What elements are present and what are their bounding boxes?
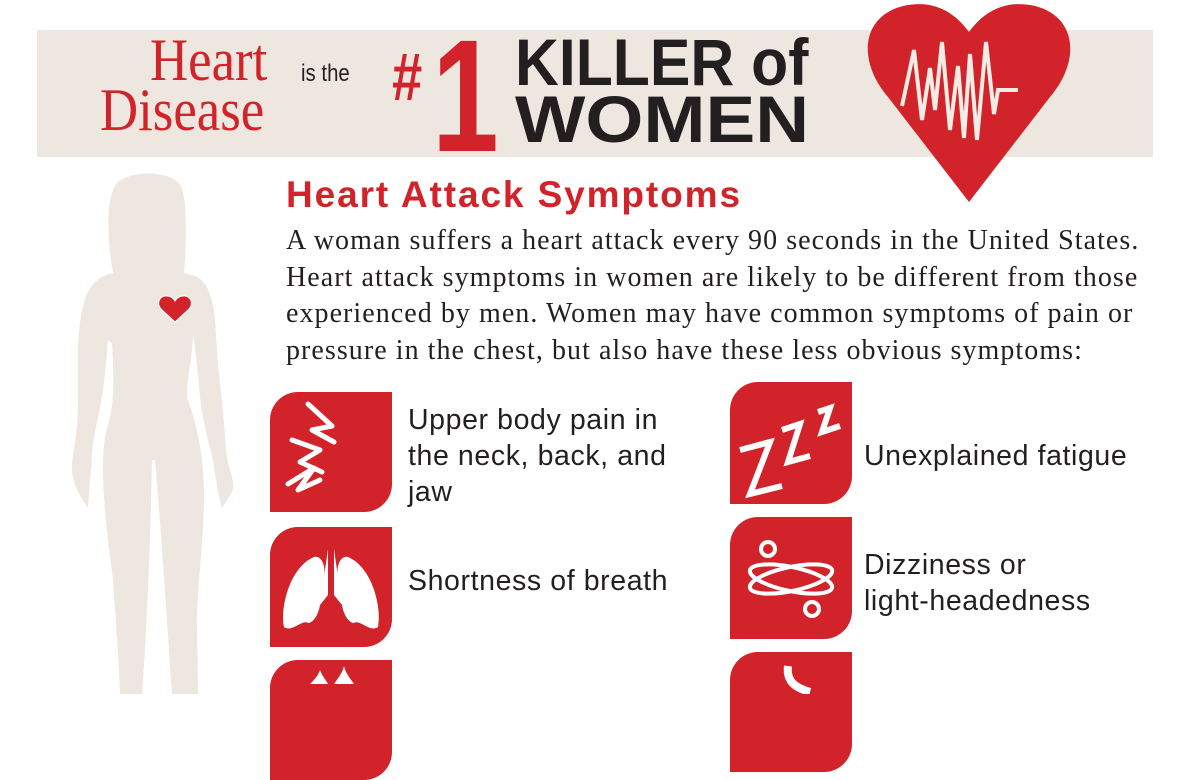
symptom: unexplained fatigue: [730, 382, 1127, 504]
icon: dizzy: [730, 517, 852, 639]
title: Heart Disease: [100, 27, 267, 143]
title: #1: 1: [432, 6, 499, 185]
symptom: third left (partial): [270, 660, 392, 780]
body silhouette: [72, 174, 233, 694]
text: light-headedness: [864, 585, 1091, 617]
symptom: shortness of breath: [270, 527, 668, 647]
title: KILLER of WOMEN: [515, 25, 809, 156]
intro paragraph: Heart attack symptoms in women are likely to be different from those: [286, 262, 1138, 293]
icon: small heart: [159, 296, 191, 322]
intro paragraph: [286, 225, 1139, 366]
text: Shortness of breath: [408, 565, 668, 597]
icon: zzz: [730, 382, 852, 504]
text: Dizziness or: [864, 549, 1026, 581]
text: the neck, back, and: [408, 440, 667, 472]
banner background: [37, 30, 1153, 157]
text: jaw: [408, 476, 453, 508]
heading: Heart Attack Symptoms: Heart Attack Symptoms: [286, 174, 742, 215]
intro paragraph: A woman suffers a heart attack every 90 seconds in the United States.: [286, 225, 1139, 256]
title: #1: [392, 6, 499, 185]
title: #1: #: [392, 39, 422, 115]
symptom: dizziness: [730, 517, 1091, 639]
title: KILLER of WOMEN: KILLER of: [515, 25, 808, 99]
text: [407, 404, 667, 508]
intro paragraph: pressure in the chest, but also have these less obvious symptoms:: [286, 335, 1083, 366]
title: KILLER of WOMEN: WOMEN: [515, 82, 809, 156]
title: is the: is the: [301, 60, 350, 87]
intro paragraph: experienced by men. Women may have common symptoms of pain or: [286, 298, 1133, 329]
text: Upper body pain in: [408, 404, 658, 436]
symptom: third right (partial): [730, 652, 852, 772]
title: Heart Disease: Heart: [150, 27, 267, 93]
icon: pain zigzag: [270, 392, 392, 512]
text: Unexplained fatigue: [864, 440, 1127, 472]
text: [864, 549, 1091, 617]
icon: heart with heartbeat: [868, 4, 1070, 202]
icon: lungs: [270, 527, 392, 647]
symptom: upper body pain: [270, 392, 667, 512]
title: Heart Disease: Disease: [100, 77, 264, 143]
